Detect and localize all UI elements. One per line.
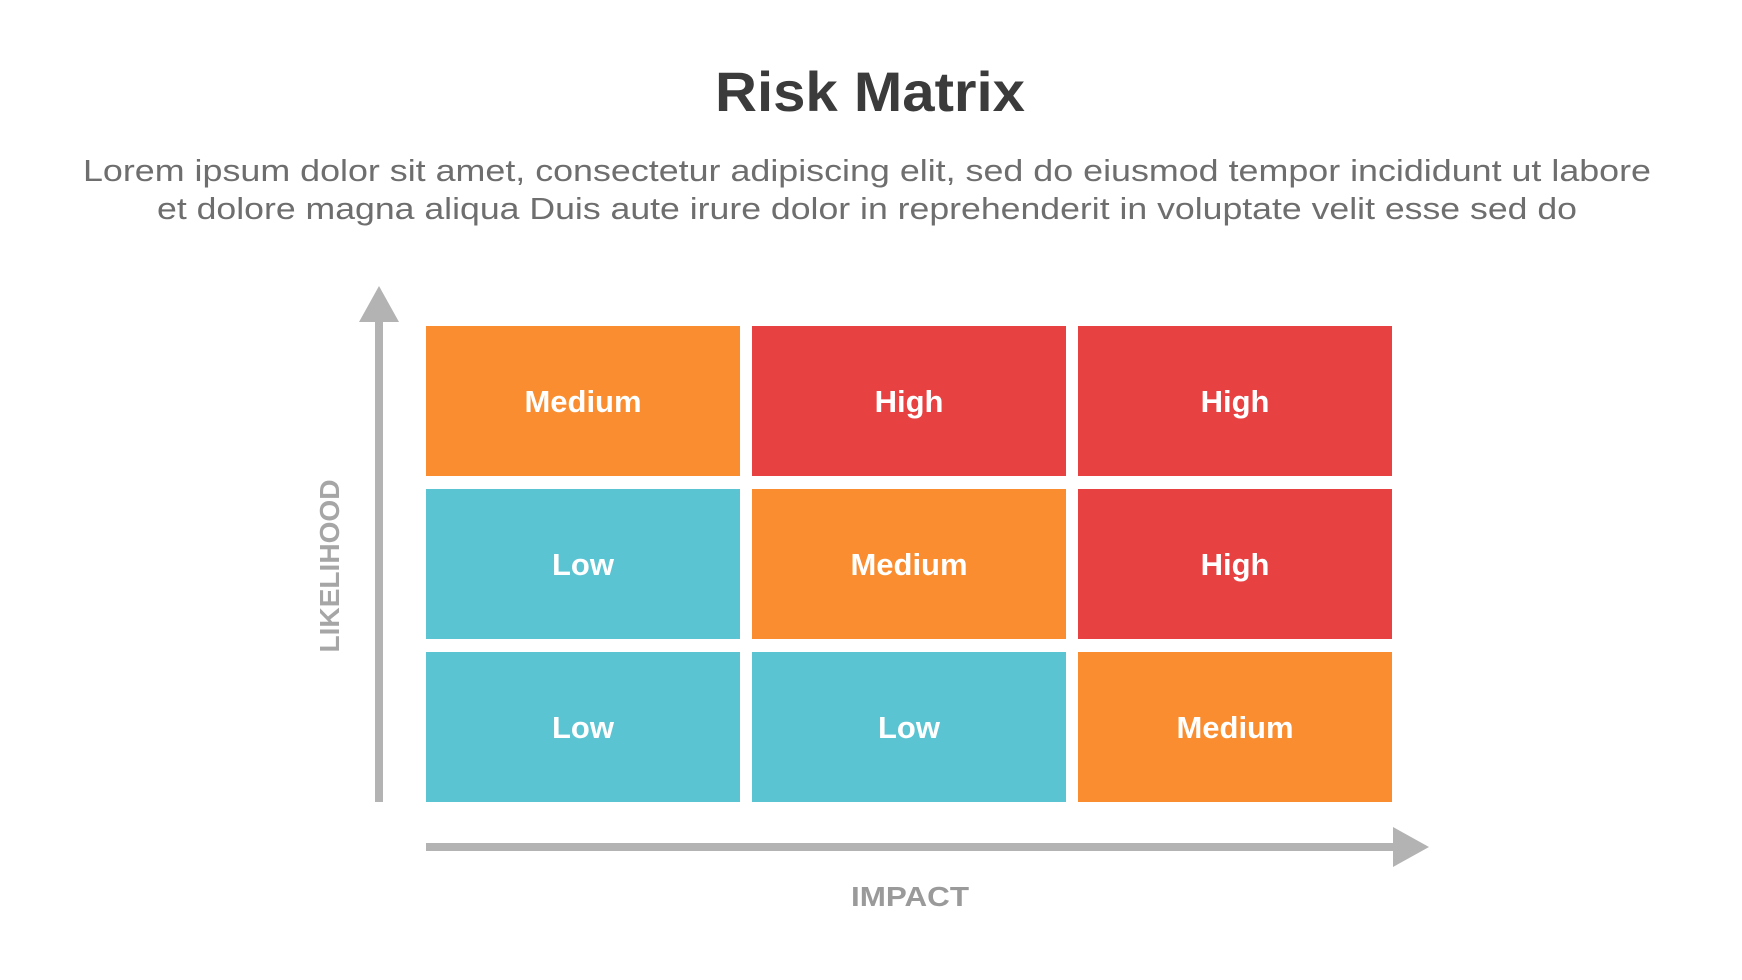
cell: low (bottom-middle) [752,652,1066,802]
cell: low (middle-left): Low [552,547,615,582]
cell: high (middle-right): High [1201,547,1269,582]
cell: high (top-right) [1078,326,1392,476]
cell: medium (center): Medium [850,547,968,582]
title: Risk Matrix [715,60,1025,123]
subtitle text block [83,153,1651,226]
cell: low (bottom-middle): Low [878,710,941,745]
axis label: impact: IMPACT [851,881,969,912]
subtitle text block: et dolore magna aliqua Duis aute irure dolor in reprehenderit in voluptate velit esse sed do [157,191,1577,226]
axis label: likelihood: LIKELIHOOD [314,480,345,652]
cell: high (top-middle) [752,326,1066,476]
risk matrix grid [426,326,1392,802]
cell: low (bottom-left) [426,652,740,802]
arrow: likelihood axis [359,286,399,802]
cell: medium (center) [752,489,1066,639]
cell: medium (top-left) [426,326,740,476]
cell: medium (bottom-right): Medium [1176,710,1294,745]
subtitle text block: Lorem ipsum dolor sit amet, consectetur adipiscing elit, sed do eiusmod tempor incididunt ut labore [83,153,1651,188]
cell: low (middle-left) [426,489,740,639]
cell: low (bottom-left): Low [552,710,615,745]
cell: high (top-right): High [1201,384,1269,419]
cell: medium (bottom-right) [1078,652,1392,802]
cell: high (top-middle): High [875,384,943,419]
cell: medium (top-left): Medium [524,384,642,419]
cell: high (middle-right) [1078,489,1392,639]
arrow: impact axis [426,827,1429,867]
